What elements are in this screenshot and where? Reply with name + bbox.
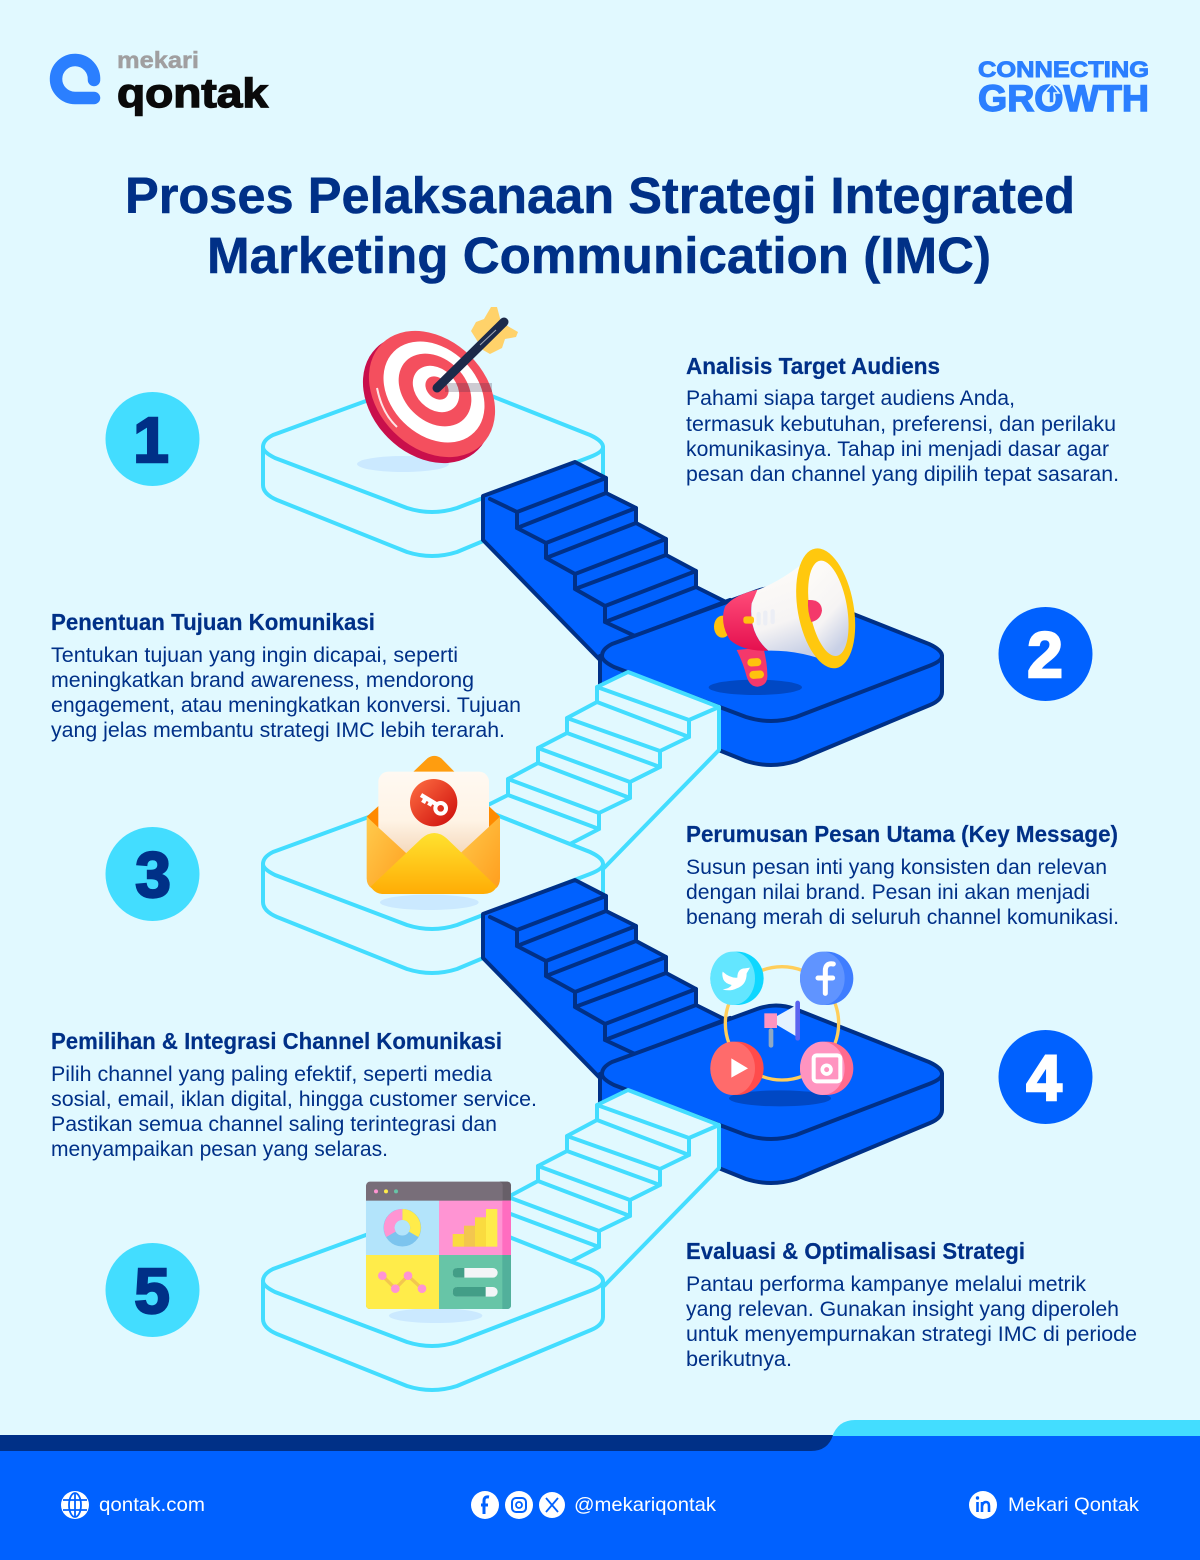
linkedin name: Mekari Qontak [1008,1494,1139,1516]
text block: step 5: berikutnya. [686,1348,792,1371]
icon: envelope with key [367,756,500,910]
logo text: mekari: mekari [117,47,199,73]
text block: step 1: Analisis Target Audiens [686,353,940,379]
text block: step 1 [686,353,1119,486]
text block: step 1: Pahami siapa target audiens Anda, [686,387,1015,410]
text block: step 2 [51,609,521,742]
text block: step 5 [686,1238,1137,1371]
title [125,167,1075,284]
social handle: @mekariqontak [574,1494,716,1516]
text block: step 1: pesan dan channel yang dipilih tepat sasaran. [686,463,1119,486]
text block: step 5: Pantau performa kampanye melalui metrik [686,1273,1086,1296]
platform 5 [263,1212,603,1390]
text block: step 4: Pilih channel yang paling efektif, seperti media [51,1063,492,1086]
logo text: qontak: qontak [117,70,268,116]
step number 2: 2 [1027,619,1063,691]
text block: step 4: menyampaikan pesan yang selaras. [51,1138,388,1161]
text block: step 2: Penentuan Tujuan Komunikasi [51,609,375,635]
text block: step 5: yang relevan. Gunakan insight yang diperoleh [686,1298,1119,1321]
stairs from step 3 to step 4 [483,880,730,1078]
text block: step 4: Pastikan semua channel saling terintegrasi dan [51,1113,497,1136]
text block: step 2: engagement, atau meningkatkan konversi. Tujuan [51,694,521,717]
icon: social channels ring [710,952,853,1106]
step number 3: 3 [135,839,171,911]
text block: step 2: meningkatkan brand awareness, mendorong [51,669,474,692]
text block: step 3: Susun pesan inti yang konsisten dan relevan [686,856,1107,879]
text block: step 1: komunikasinya. Tahap ini menjadi dasar agar [686,438,1109,461]
logo: connecting growth [978,57,1149,119]
text block: step 5: untuk menyempurnakan strategi IMC di periode [686,1323,1137,1346]
footer [0,1420,1200,1560]
text block: step 2: yang jelas membantu strategi IMC lebih terarah. [51,719,505,742]
step number 5: 5 [134,1255,170,1327]
title: Marketing Communication (IMC) [207,227,991,284]
icon: linkedin [969,1491,997,1519]
icon: instagram [505,1491,533,1519]
step number 5 [106,1243,200,1337]
text block: step 3 [686,821,1119,929]
icon: megaphone [709,544,864,695]
connecting wordmark: CONNECTING [978,57,1149,82]
platform 4 [600,1006,942,1183]
step number 1: 1 [133,404,169,476]
footer background [0,1420,1200,1560]
logo: mekari qontak [56,47,268,116]
icon: growth arrow [1045,84,1059,103]
text block: step 4 [51,1028,537,1161]
platform 1 [263,378,603,556]
step number 1 [106,392,200,486]
icon: target with arrow [337,306,520,489]
text block: step 2: Tentukan tujuan yang ingin dicapai, seperti [51,644,458,667]
text block: step 3: benang merah di seluruh channel komunikasi. [686,906,1119,929]
stairs from step 4 to step 5 [478,1090,719,1286]
title: Proses Pelaksanaan Strategi Integrated [125,167,1075,224]
text block: step 4: sosial, email, iklan digital, hingga customer service. [51,1088,537,1111]
platform 3 [263,796,603,973]
icon: x [539,1492,565,1518]
text block: step 1: termasuk kebutuhan, preferensi, dan perilaku [686,413,1116,436]
step number 2 [998,607,1092,701]
stairs from step 2 to step 3 [478,672,719,868]
icon: facebook [471,1491,499,1519]
stairs from step 1 to step 2 [483,462,730,660]
growth wordmark: GROWTH [978,77,1149,119]
icon: qontak logo mark [56,60,94,98]
text block: step 5: Evaluasi & Optimalisasi Strategi [686,1238,1025,1264]
text block: step 3: Perumusan Pesan Utama (Key Message) [686,821,1118,847]
icon: analytics dashboard [366,1182,511,1323]
step number 4: 4 [1026,1042,1062,1114]
text block: step 4: Pemilihan & Integrasi Channel Komunikasi [51,1028,502,1054]
platform 2 [600,588,942,765]
icon: globe [61,1491,89,1519]
step number 4 [998,1030,1092,1124]
step number 3 [106,827,200,921]
text block: step 3: dengan nilai brand. Pesan ini akan menjadi [686,881,1090,904]
website: qontak.com [99,1494,205,1516]
